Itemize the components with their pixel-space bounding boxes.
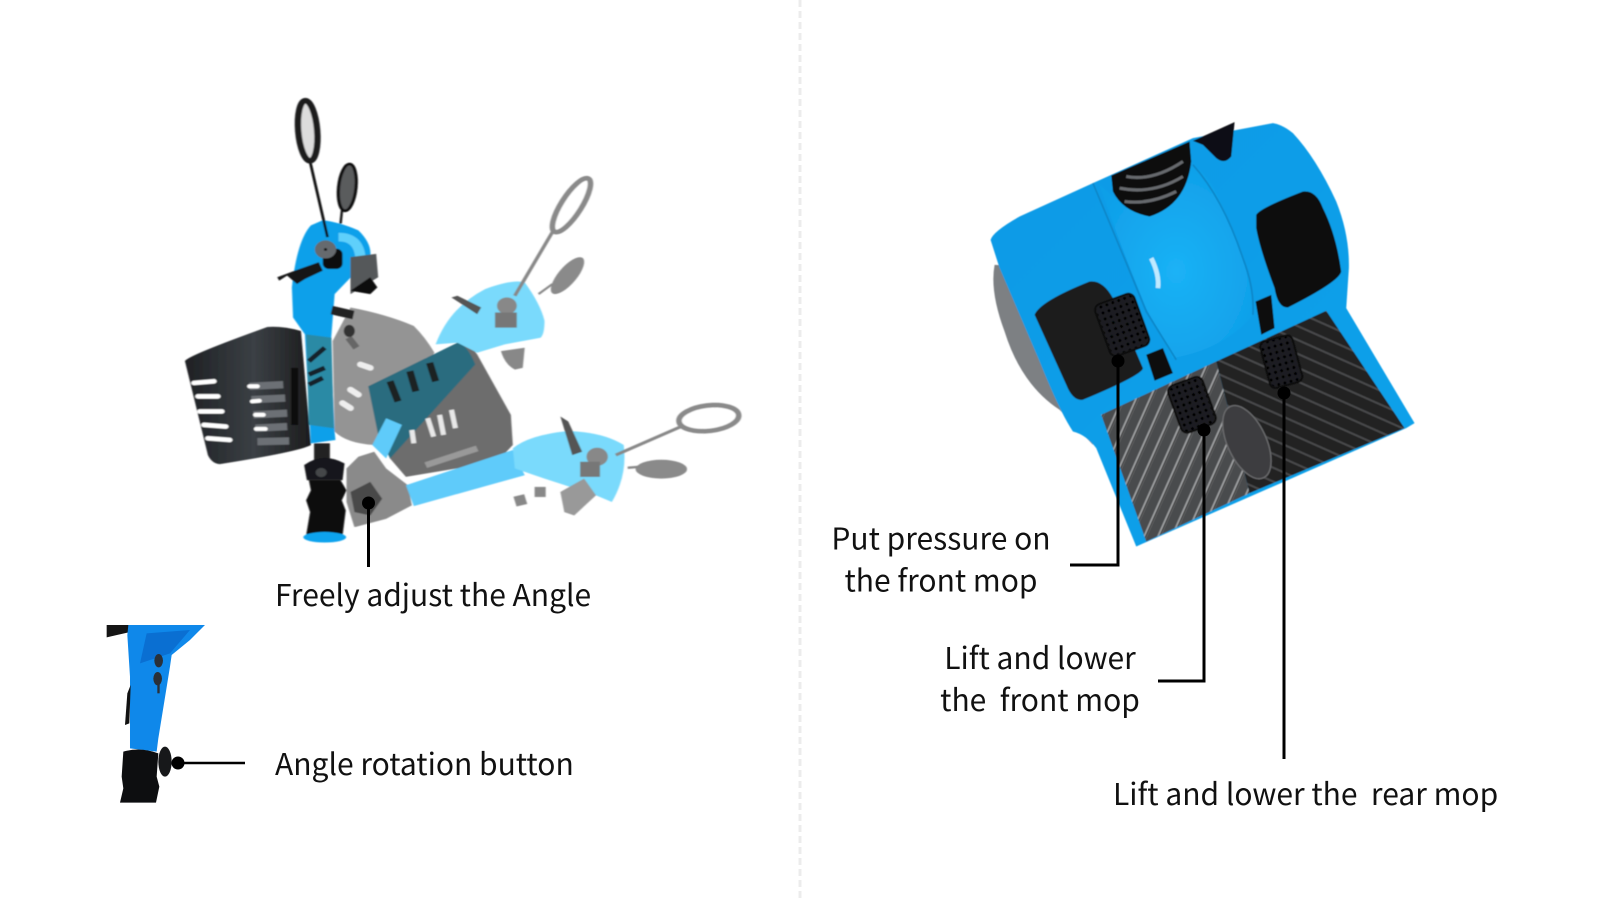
label: put pressure on the front mop xyxy=(831,514,1051,600)
callout line: put pressure on the front mop xyxy=(1070,354,1124,565)
rubber mat xyxy=(1101,311,1405,541)
illustration: angle rotation button inset xyxy=(107,625,205,803)
main joint and bellows xyxy=(303,443,346,543)
ghost lower basket with teal overlay xyxy=(368,343,513,477)
label: lift and lower the front mop xyxy=(940,634,1140,720)
ghost lower joint xyxy=(346,452,412,527)
blue body xyxy=(991,123,1415,546)
left pad xyxy=(1035,281,1143,400)
top cut black wedge xyxy=(1193,122,1235,161)
label: put pressure on the front mop: the front mop xyxy=(844,556,1038,600)
label: angle rotation button: Angle rotation button xyxy=(275,740,574,784)
pedal: lift front mop xyxy=(1166,375,1218,435)
callout line: lift and lower the front mop xyxy=(1158,424,1210,681)
main mirrors xyxy=(296,100,358,237)
pedal: front mop pressure xyxy=(1093,292,1151,358)
label: lift and lower the front mop: the front mop xyxy=(940,676,1140,720)
label: lift and lower the front mop: Lift and lower xyxy=(944,634,1136,678)
callout line: freely adjust the angle xyxy=(362,496,375,567)
center section xyxy=(1100,165,1253,358)
keys xyxy=(153,654,163,693)
ghost position: lowered handlebar xyxy=(406,402,741,515)
hinge brackets xyxy=(1146,295,1275,381)
main basket xyxy=(185,327,311,464)
main handlebar column xyxy=(277,220,378,443)
black bar xyxy=(107,625,133,637)
right pad xyxy=(1256,191,1341,308)
rotation button xyxy=(158,747,172,777)
ghost position: mid handlebar xyxy=(372,174,597,458)
divider between panels xyxy=(798,0,802,900)
label: freely adjust the angle: Freely adjust the Angle xyxy=(275,571,591,615)
callout line: angle rotation button xyxy=(172,756,245,770)
label: put pressure on the front mop: Put pressure on xyxy=(831,514,1051,558)
illustration: footrest with pedals xyxy=(991,122,1415,546)
illustration: handlebar angle positions xyxy=(185,100,741,543)
label: lift and lower the rear mop: Lift and lower the rear mop xyxy=(1113,770,1498,814)
callout line: lift and lower the rear mop xyxy=(1278,386,1290,759)
pedal: lift rear mop xyxy=(1259,334,1304,389)
blue column xyxy=(127,625,205,752)
wheel xyxy=(993,265,1093,445)
bellows xyxy=(120,750,159,803)
collar bellows xyxy=(1111,141,1191,216)
ghost mid basket xyxy=(333,307,434,445)
